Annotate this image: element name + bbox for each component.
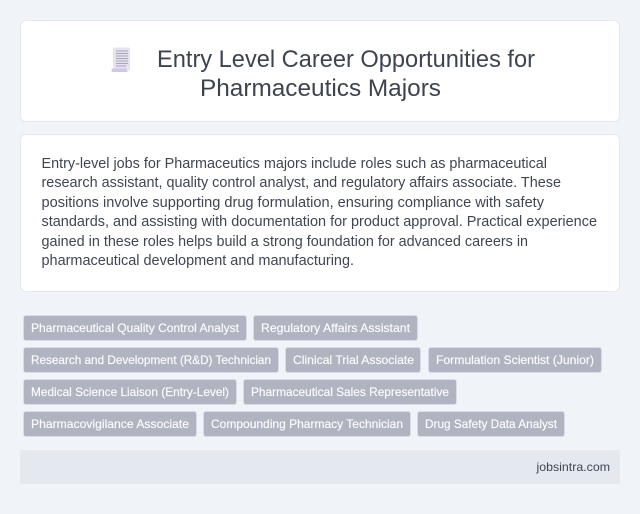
tag (418, 412, 564, 436)
text block: description: pharmaceutical development and manufacturing. (42, 253, 354, 269)
text block: description: research assistant, quality control analyst, and regulatory affairs associate. These (42, 175, 561, 191)
text block: description: standards, and assisting with documentation for product approval. Practical experience (42, 214, 597, 230)
tag (204, 412, 410, 436)
tag: Research and Development (R&D) Technician (31, 353, 271, 367)
tag (24, 412, 196, 436)
text block: description (42, 156, 597, 269)
tag: Regulatory Affairs Assistant (261, 321, 411, 335)
tag (24, 316, 246, 340)
tag: Drug Safety Data Analyst (425, 417, 558, 431)
tag (244, 380, 456, 404)
tag (286, 348, 420, 372)
text block: description: positions involve supporting drug formulation, ensuring compliance with safety (42, 195, 545, 211)
tag: Medical Science Liaison (Entry-Level) (31, 385, 229, 399)
icon: document scroll (112, 48, 130, 72)
title (157, 46, 535, 102)
tag (24, 348, 278, 372)
title: Pharmaceutics Majors (200, 75, 441, 102)
text block: description: Entry-level jobs for Pharmaceutics majors include roles such as pharmaceutical (42, 156, 547, 172)
tag: Pharmacovigilance Associate (31, 417, 189, 431)
tag (24, 380, 236, 404)
footer: jobsintra.com (535, 460, 610, 474)
tag: Pharmaceutical Sales Representative (251, 385, 449, 399)
panel: header (20, 20, 620, 122)
tag (428, 348, 602, 372)
tag: Formulation Scientist (Junior) (436, 353, 594, 367)
tag: Pharmaceutical Quality Control Analyst (31, 321, 240, 335)
footer (20, 450, 620, 484)
tags: job roles (24, 316, 602, 436)
title: Entry Level Career Opportunities for (157, 46, 535, 73)
tag: Compounding Pharmacy Technician (211, 417, 403, 431)
text block: description: gained in these roles helps build a strong foundation for advanced careers in (42, 234, 528, 250)
panel: description (20, 134, 620, 292)
tag (254, 316, 418, 340)
tag: Clinical Trial Associate (293, 353, 414, 367)
